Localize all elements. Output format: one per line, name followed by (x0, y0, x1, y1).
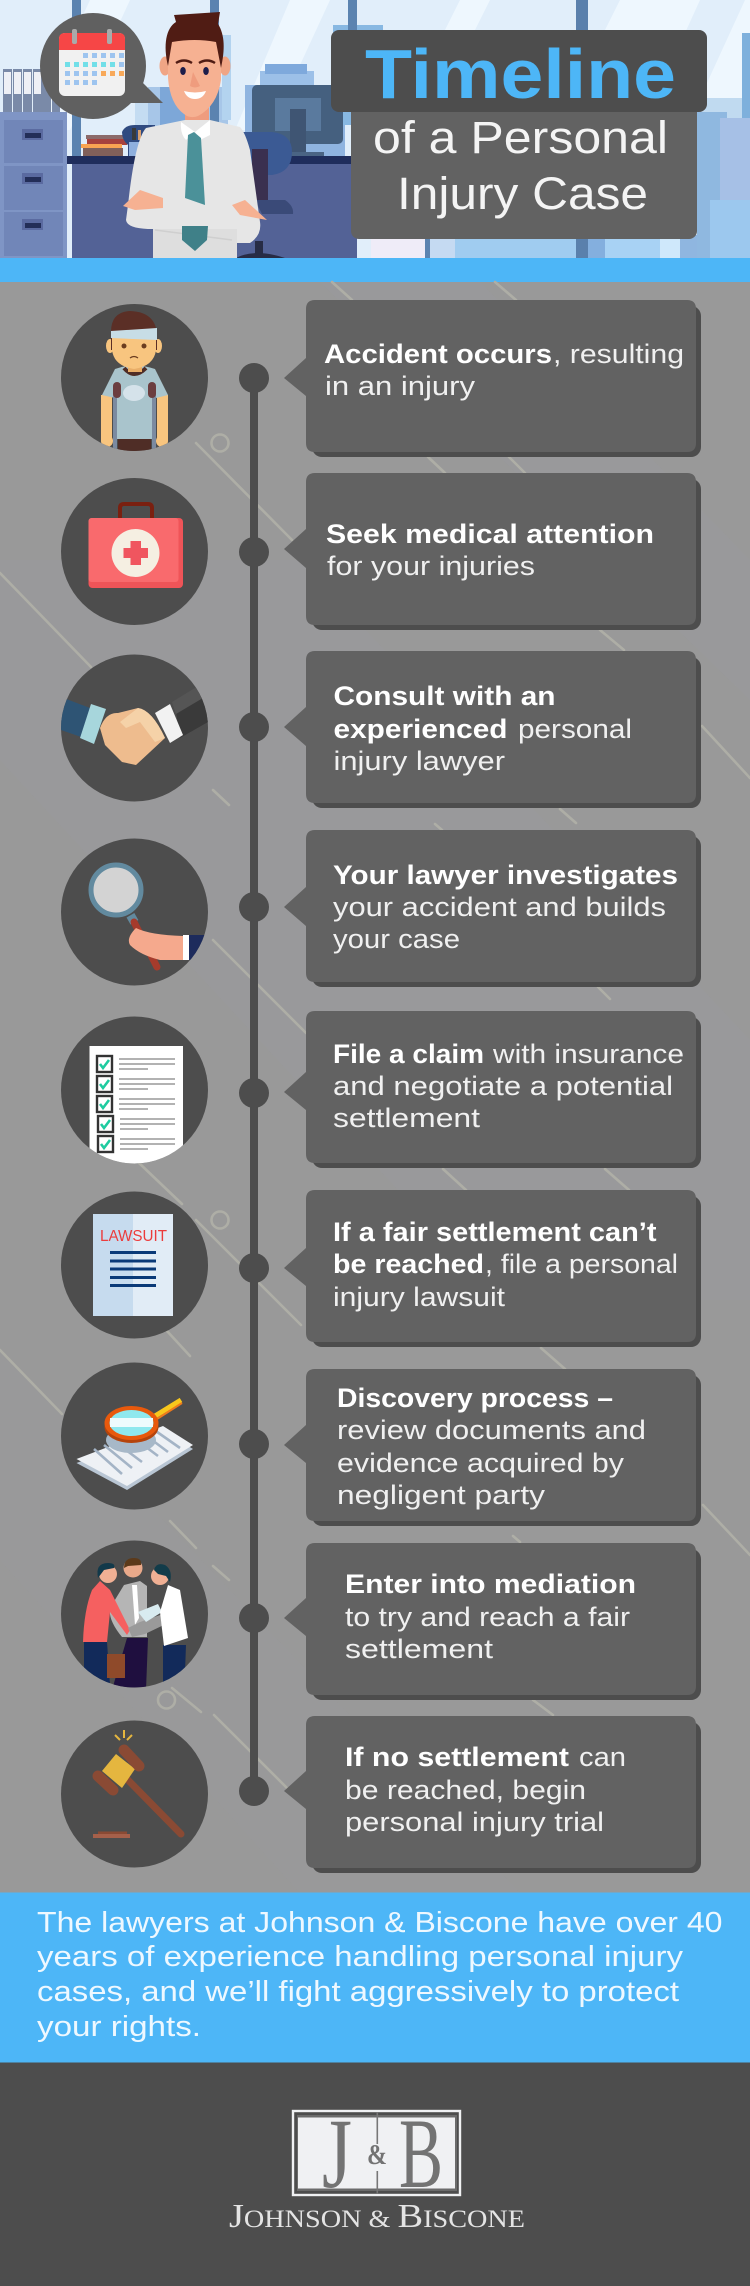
text: lawsuit: injury lawsuit (333, 1282, 506, 1312)
logo: J & B monogram: & (367, 2140, 387, 2171)
timeline node (239, 1429, 269, 1459)
card shadow (312, 657, 701, 808)
text: discovery process: negligent party (337, 1480, 546, 1510)
text: seek medical attention: for your injuries (327, 551, 535, 581)
text: mediation: settlement (345, 1634, 494, 1664)
card shadow (312, 1722, 701, 1873)
step 2: seek medical attention (61, 473, 701, 630)
icon: hand with magnifying glass (61, 838, 210, 986)
card shadow (312, 1196, 701, 1347)
step 4: lawyer investigates (61, 830, 701, 987)
timeline node (239, 363, 269, 393)
card (284, 830, 696, 982)
icon: lawsuit document (61, 1192, 208, 1338)
icon: three people shaking hands (61, 1540, 208, 1690)
text: mediation (345, 1569, 636, 1664)
text: file a claim: settlement (333, 1103, 481, 1133)
office chair (236, 132, 293, 258)
man with crossed arms (123, 12, 267, 258)
blue closing statement band: The lawyers at Johnson & Biscone have over 40 (37, 1907, 722, 1939)
timeline node (239, 1776, 269, 1806)
text: discovery process (337, 1383, 646, 1510)
card shadow (312, 479, 701, 630)
card shadow (312, 306, 701, 457)
blue divider band (0, 258, 750, 282)
text: consult lawyer: experienced (334, 714, 508, 744)
text: consult lawyer: personal (518, 714, 632, 744)
header illustration: office scene (0, 0, 750, 258)
text: discovery process: Discovery process – (337, 1383, 613, 1413)
icon: checklist (61, 1016, 208, 1171)
timeline node (239, 712, 269, 742)
text: mediation: to try and reach a fair (345, 1602, 630, 1632)
step 8: mediation (61, 1540, 701, 1700)
blue closing statement band (0, 1892, 750, 2062)
monitor (252, 85, 343, 157)
text: file a claim: with insurance (492, 1039, 684, 1069)
timeline section background (0, 282, 750, 1893)
text: consult lawyer: injury lawyer (334, 746, 505, 776)
logo: J & B monogram: J (322, 2098, 352, 2209)
card (284, 1011, 696, 1163)
text: consult lawyer: Consult with an (334, 681, 556, 711)
heading: Injury Case: Injury Case (397, 168, 648, 219)
text: file a claim: File a claim (333, 1039, 484, 1069)
card shadow (312, 1375, 701, 1526)
logo: J & B monogram: B (399, 2098, 443, 2209)
text: file a claim (333, 1039, 684, 1133)
text: accident occurs: , resulting (553, 339, 684, 369)
step 6: lawsuit (61, 1190, 701, 1347)
text: consult lawyer (334, 681, 632, 776)
timeline node (239, 537, 269, 567)
text: lawyer investigates (333, 860, 678, 954)
text: trial: personal injury trial (345, 1807, 604, 1837)
card (284, 1543, 696, 1695)
title panel (331, 30, 707, 239)
timeline node (239, 892, 269, 922)
blue closing statement band: cases, and we’ll fight aggressively to protect (37, 1976, 679, 2008)
timeline node (239, 1253, 269, 1283)
text: lawsuit: If a fair settlement can’t (333, 1217, 657, 1247)
step 1: accident occurs (61, 300, 701, 457)
step 9: trial (61, 1716, 701, 1873)
text: mediation: Enter into mediation (345, 1569, 636, 1599)
text: lawsuit (333, 1217, 678, 1312)
text: trial: can (579, 1742, 626, 1772)
card shadow (312, 1017, 701, 1168)
desk (61, 156, 361, 258)
text: discovery process: evidence acquired by (337, 1448, 625, 1478)
text: accident occurs: in an injury (325, 371, 476, 401)
card (284, 1190, 696, 1342)
text: lawyer investigates: your accident and builds (333, 892, 666, 922)
icon: first aid kit (61, 478, 208, 625)
text: seek medical attention: Seek medical attention (326, 519, 654, 549)
text: trial (345, 1742, 626, 1837)
text: lawsuit: be reached (333, 1249, 484, 1279)
text: lawyer investigates: Your lawyer investigates (333, 860, 678, 890)
filing cabinet and binders (0, 69, 67, 258)
text: lawyer investigates: your case (333, 924, 460, 954)
timeline node (239, 1603, 269, 1633)
text: trial: be reached, begin (345, 1775, 586, 1805)
blue closing statement band: years of experience handling personal injury (37, 1941, 684, 1973)
footer (0, 2062, 750, 2286)
icon: gavel (61, 1720, 208, 1868)
text: lawsuit: , file a personal (485, 1249, 678, 1279)
text: seek medical attention (326, 519, 654, 581)
text: accident occurs (324, 339, 684, 401)
card (284, 473, 696, 625)
text: accident occurs: Accident occurs (324, 339, 552, 369)
card (284, 1369, 696, 1521)
icon: magnifier over document (61, 1362, 208, 1510)
card (284, 651, 696, 803)
text: file a claim: and negotiate a potential (333, 1071, 673, 1101)
text: discovery process: review documents and (337, 1415, 646, 1445)
timeline node (239, 1078, 269, 1108)
card shadow (312, 836, 701, 987)
speech bubble with calendar (40, 13, 163, 119)
text: trial: If no settlement (345, 1742, 569, 1772)
card shadow (312, 1549, 701, 1700)
blue closing statement band: your rights. (37, 2011, 201, 2043)
logo: firm name: JOHNSON & BISCONE (229, 2198, 525, 2235)
step 7: discovery process (61, 1362, 701, 1526)
logo: J & B monogram (293, 2098, 460, 2209)
books and pen holder (81, 125, 155, 156)
card (284, 300, 696, 452)
heading: Timeline: Timeline (365, 35, 676, 113)
icon: injured man on crutches (61, 304, 208, 452)
icon: lawsuit document: LAWSUIT (100, 1228, 168, 1245)
step 3: consult lawyer (61, 651, 701, 808)
step 5: file a claim (61, 1011, 701, 1171)
heading: of a Personal: of a Personal (373, 112, 668, 163)
timeline vertical line (250, 378, 258, 1791)
icon: handshake (61, 654, 208, 802)
card (284, 1716, 696, 1868)
